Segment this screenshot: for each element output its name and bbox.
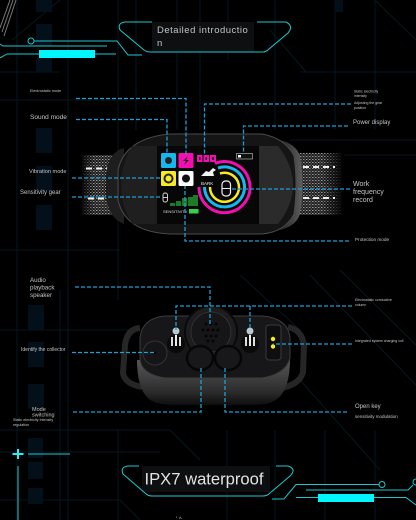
right lug (280, 140, 302, 230)
label: identify the collector: Identify the collector (21, 347, 66, 353)
yellow indicator panel (266, 325, 281, 360)
left probe (167, 328, 185, 353)
label: power display: Power display (353, 120, 390, 126)
speaker (185, 306, 237, 358)
watch strap: right (298, 153, 344, 215)
icon: sound mode (161, 153, 176, 168)
label: audio playback speaker (30, 277, 55, 299)
label: static electricity intensity: position (354, 106, 366, 110)
label: work frequency record: record (353, 197, 373, 204)
callout leader lines (72, 98, 352, 412)
label: mode switching: switching (32, 412, 55, 418)
icon: barking dog (201, 168, 216, 176)
label: electrostatic mode: Electrostatic mode (30, 89, 61, 93)
lower buttons (187, 346, 241, 370)
label: work frequency record (353, 181, 384, 204)
device: screen unit (106, 134, 302, 234)
icon: protection mode (178, 171, 194, 186)
waterproof banner (122, 466, 293, 496)
sensitivity bars (170, 195, 198, 206)
pink intensity boxes (197, 155, 216, 162)
label: static electricity intensity (354, 90, 383, 110)
left lug (106, 148, 124, 224)
label: vibration mode: Vibration mode (29, 169, 67, 175)
body top (140, 316, 290, 378)
label: static electricity intensity: intensity (354, 94, 367, 98)
work frequency rings (199, 162, 250, 213)
decoration: diagonal stripes top left (0, 0, 16, 36)
screen (157, 146, 259, 224)
label: static electricity intensity regulation: regulation (13, 423, 29, 427)
identify collector button (143, 341, 167, 365)
circuit: top left (0, 38, 142, 58)
green tag (189, 209, 198, 214)
watch strap: left (80, 155, 118, 215)
label: audio playback speaker: playback (30, 284, 55, 292)
label: audio playback speaker: speaker (30, 292, 52, 299)
device: remote (123, 306, 304, 405)
sensitivity label: SENSITIVITY (163, 209, 188, 214)
label: sensitivity modulation: sensitivity modulation (355, 414, 398, 419)
label: sensitivity gear: Sensitivity gear (20, 190, 61, 196)
right loop (282, 327, 304, 388)
label: electrostatic conductive column: Electrostatic conductive (355, 298, 392, 302)
sensitivity digit (163, 193, 168, 202)
label: protection mode: Protection mode (355, 237, 390, 242)
power display (236, 154, 252, 159)
right glass area (259, 146, 293, 224)
label: open key: Open key (355, 404, 381, 410)
title banner: Detailed introduction: Detailed introductio (157, 25, 248, 36)
label: static electricity intensity regulation (13, 418, 53, 427)
label: audio playback speaker: Audio (30, 277, 46, 284)
circuit: bottom plus (12, 449, 70, 520)
digit 8 divider (222, 188, 230, 190)
label: mode switching: Mode (32, 407, 46, 413)
digit 8 (222, 181, 230, 196)
right probe (241, 328, 259, 353)
faint left squares (28, 0, 343, 504)
BARK label: BARK (201, 181, 213, 186)
label: electrostatic conductive column: column (355, 303, 366, 307)
left loop (123, 328, 142, 387)
left glass area (121, 146, 157, 224)
watch body (118, 134, 296, 234)
label: work frequency record: frequency (353, 189, 384, 196)
label: work frequency record: Work (353, 181, 370, 188)
label: static electricity intensity regulation: Static electricity intensity (13, 418, 53, 422)
circuit: bottom right (272, 479, 416, 505)
waterproof banner: IPX7 waterproof (144, 470, 264, 488)
label: mode switching (32, 407, 55, 418)
label: static electricity intensity: Adjusting the gear (354, 101, 383, 105)
label: sound mode: Sound mode (30, 114, 67, 121)
icon: vibration mode (161, 171, 176, 186)
label: static electricity intensity: Static electricity (354, 90, 379, 94)
title banner: Detailed introduction: n (157, 38, 162, 49)
body side (137, 360, 290, 405)
icon: electrostatic mode (178, 153, 194, 168)
title banner: Detailed introduction (119, 22, 291, 52)
label: electrostatic conductive column (355, 298, 392, 307)
label: integrated system charging coil: Integrated system charging coil (355, 339, 404, 343)
